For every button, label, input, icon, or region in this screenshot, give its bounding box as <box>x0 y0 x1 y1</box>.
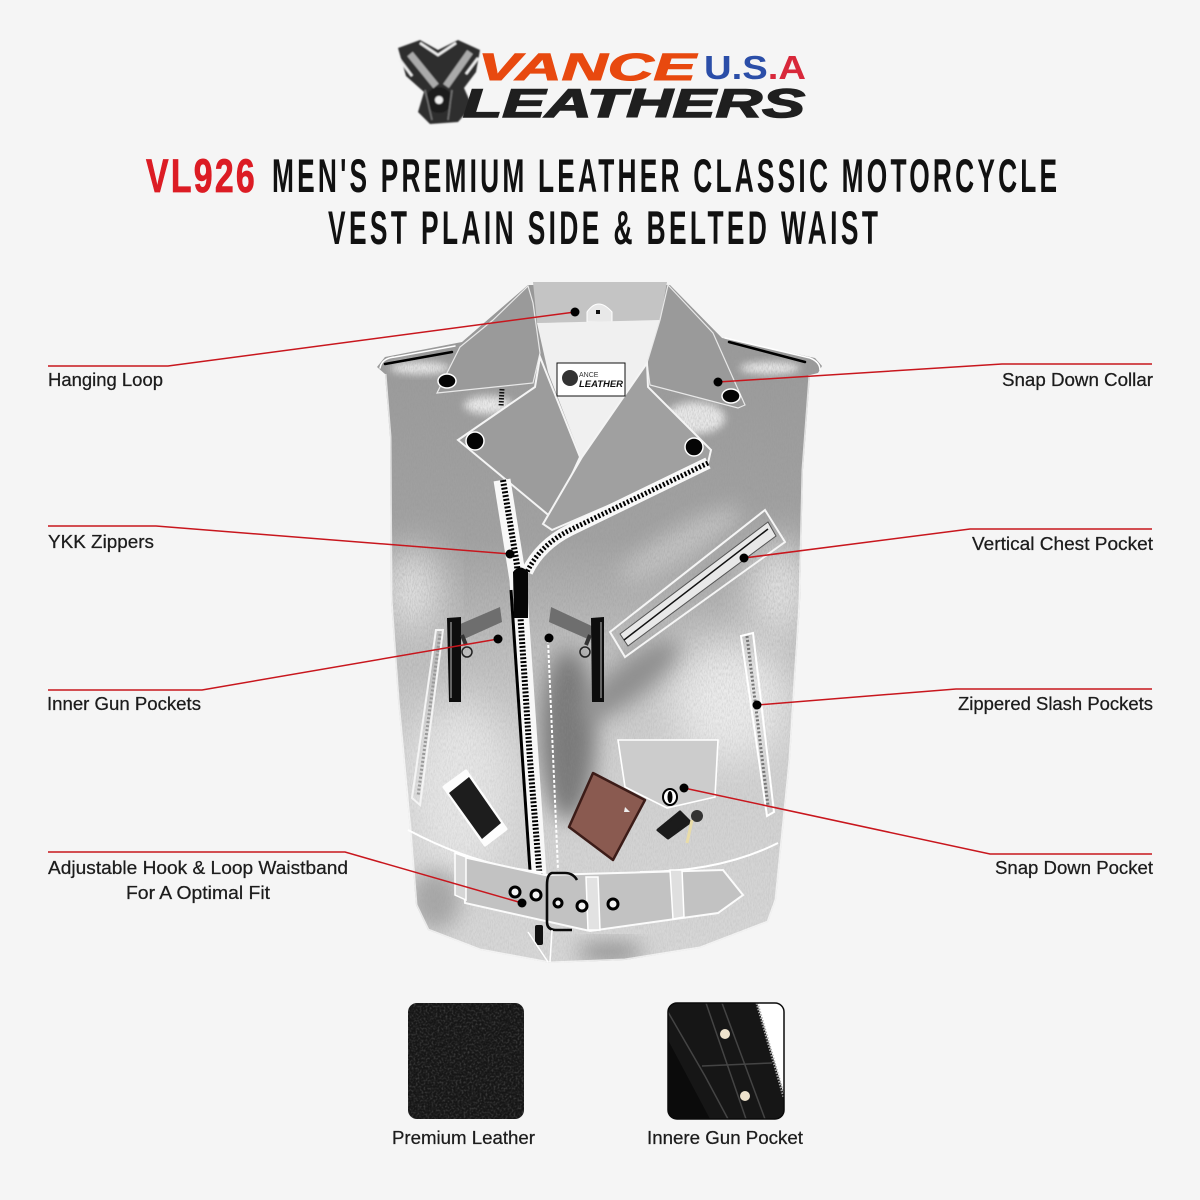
logo word: LEATHERS: LEATHERS <box>463 82 805 126</box>
zipper slider <box>513 568 528 618</box>
hanging loop <box>587 304 612 322</box>
title <box>146 150 1057 255</box>
callout: inner gun pockets <box>47 634 554 714</box>
car keys <box>658 810 703 843</box>
snap down pocket <box>618 740 718 808</box>
callout: snap down collar <box>714 364 1153 390</box>
swatch: premium leather <box>392 1003 535 1148</box>
collar left <box>437 286 540 393</box>
placket bottom seam <box>528 930 552 962</box>
gun left <box>447 607 502 702</box>
belt <box>455 853 743 931</box>
buckle <box>547 873 577 930</box>
small zipper at left chest <box>501 389 502 407</box>
neck label: LEATHER <box>579 379 624 389</box>
callout: zippered slash pockets <box>752 689 1153 714</box>
callout: adjustable waistband: Adjustable Hook & Loop Waistband <box>48 858 348 878</box>
grommets <box>510 887 618 911</box>
callout: hanging loop <box>48 308 580 390</box>
callout: snap down pocket <box>680 784 1153 878</box>
callout: vertical chest pocket <box>740 529 1153 562</box>
title: MEN'S PREMIUM LEATHER CLASSIC MOTORCYCLE <box>272 151 1057 203</box>
zipper pull <box>535 925 543 945</box>
title: VEST PLAIN SIDE & BELTED WAIST <box>328 203 878 255</box>
callout: adjustable waistband <box>48 852 526 908</box>
callout: zippered slash pockets: Zippered Slash Pockets <box>958 694 1153 714</box>
logo word: VANCE: VANCE <box>478 47 699 89</box>
icon: engine <box>398 40 480 124</box>
vertical chest pocket <box>610 510 785 657</box>
callout: inner gun pockets: Inner Gun Pockets <box>47 694 201 714</box>
lining <box>537 320 660 460</box>
lapel left <box>458 357 580 518</box>
shoulder straps <box>380 338 820 370</box>
vest body <box>370 275 830 970</box>
callout: adjustable waistband: For A Optimal Fit <box>126 883 270 903</box>
callout: snap down pocket: Snap Down Pocket <box>995 858 1153 878</box>
logo <box>398 40 806 126</box>
swatch: inner gun pocket <box>647 1003 803 1148</box>
neck label: ANCE <box>579 372 599 379</box>
logo word: USA: U.S .A <box>704 49 806 86</box>
gun right <box>549 607 604 702</box>
main zipper <box>502 480 558 905</box>
callout: hanging loop: Hanging Loop <box>48 370 163 390</box>
swatch: premium leather: Premium Leather <box>392 1128 535 1148</box>
collar right <box>647 285 745 408</box>
swatch: inner gun pocket: Innere Gun Pocket <box>647 1128 803 1148</box>
slash pocket left <box>412 630 443 805</box>
callout: ykk zippers <box>48 526 514 558</box>
phone <box>444 771 506 845</box>
slash pocket right <box>741 633 774 816</box>
diagonal zipper <box>527 463 708 572</box>
collar band <box>533 282 667 323</box>
callout: ykk zippers: YKK Zippers <box>48 532 154 552</box>
snaps <box>438 374 740 456</box>
callout: snap down collar: Snap Down Collar <box>1002 370 1153 390</box>
wallet <box>569 773 645 860</box>
waistband seam <box>408 830 778 872</box>
callout: vertical chest pocket: Vertical Chest Pocket <box>972 534 1153 554</box>
title: VL926 <box>146 150 255 202</box>
lapel right <box>543 363 711 530</box>
neck label <box>557 363 625 396</box>
vest <box>370 275 830 970</box>
